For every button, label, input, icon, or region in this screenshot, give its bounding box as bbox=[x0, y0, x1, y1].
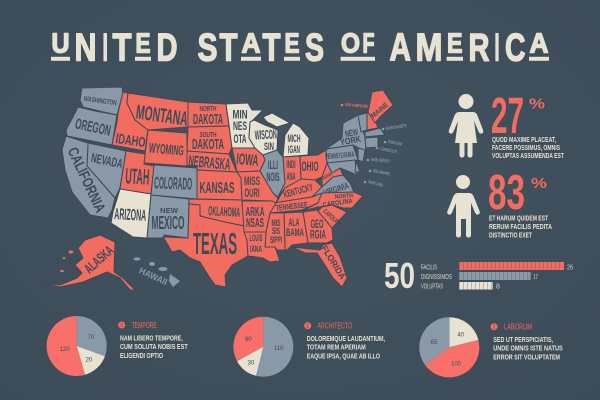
pie chart: 70 bbox=[88, 335, 95, 341]
state: Wisconsin bbox=[249, 120, 278, 155]
state: Oregon: OREGON bbox=[74, 116, 112, 140]
title: R bbox=[468, 26, 490, 69]
state: Texas: TEXAS bbox=[193, 226, 237, 261]
state: Arkansas: NSAS bbox=[246, 215, 264, 230]
state: Louisiana bbox=[244, 232, 280, 262]
state: Ohio bbox=[300, 150, 327, 180]
small state callouts: CONNECTICUT bbox=[380, 146, 398, 155]
title: E bbox=[136, 28, 150, 58]
state: New Jersey bbox=[358, 148, 365, 162]
state: North Dakota: DAKOTA bbox=[193, 111, 223, 128]
state: New Mexico: MEXICO bbox=[152, 213, 184, 233]
text block: SED UT PERSPICIATIS, bbox=[493, 335, 553, 344]
title: S bbox=[305, 26, 324, 69]
state: Michigan: MICH bbox=[288, 133, 301, 145]
state: South Dakota: SOUTH bbox=[200, 132, 216, 139]
title: C bbox=[505, 26, 526, 69]
title: E bbox=[447, 28, 462, 58]
state: Iowa bbox=[232, 148, 265, 172]
state: Kentucky: KENTUCKY bbox=[282, 182, 314, 201]
state: Mississippi: SIS bbox=[272, 226, 280, 236]
text block: QUOD MAXIME PLACEAT, bbox=[492, 135, 556, 144]
map of the United States: WISCON bbox=[254, 126, 277, 143]
state: Virginia bbox=[312, 175, 354, 198]
stat: 83 percent male: % bbox=[531, 175, 547, 192]
state: Mississippi bbox=[265, 213, 285, 250]
state: Washington bbox=[80, 87, 123, 115]
title: I bbox=[102, 26, 108, 69]
pie panel: tempore: 3 bbox=[120, 323, 123, 329]
state: California: CALIFORNIA bbox=[64, 145, 109, 216]
bar chart: 50: FACILIS bbox=[421, 264, 437, 272]
state: Hawaii: HAWAII bbox=[138, 265, 169, 287]
state: Illinois: ILLI bbox=[268, 158, 278, 172]
bar chart: 50: 26 bbox=[567, 264, 573, 272]
pie chart: 30 bbox=[248, 360, 255, 366]
text block bbox=[493, 335, 563, 362]
text block: VOLUPTAS ASSUMENDA EST bbox=[492, 151, 564, 160]
title: U bbox=[52, 28, 70, 58]
state: Wyoming: WYOMING bbox=[148, 140, 185, 159]
state: Missouri: MISS bbox=[244, 174, 260, 188]
title: N bbox=[74, 26, 96, 69]
state: South Carolina bbox=[317, 205, 347, 228]
state: Utah bbox=[120, 151, 154, 194]
state: New Mexico: NEW bbox=[160, 208, 178, 215]
state: Virginia: VIRGINIA bbox=[322, 180, 350, 198]
state: Georgia: RGIA bbox=[310, 228, 326, 242]
pie chart: 110 bbox=[274, 346, 284, 352]
title: T bbox=[262, 26, 281, 69]
state: Missouri bbox=[237, 171, 278, 203]
state: Kansas bbox=[197, 170, 242, 200]
state: Michigan bbox=[263, 113, 309, 157]
bar chart: 50: VOLUPTAS bbox=[421, 284, 443, 290]
title: O bbox=[341, 28, 360, 58]
text block: ERROR SIT VOLUPTATEM bbox=[493, 352, 560, 362]
small state callouts: NEW JERSEY bbox=[371, 157, 390, 164]
title: T bbox=[220, 26, 238, 69]
pie chart bbox=[233, 317, 293, 377]
stat: 83 percent male: 83 bbox=[488, 166, 525, 220]
text block: NAM LIBERO TEMPORE, bbox=[120, 334, 183, 342]
small state callouts: MASSACHUSETTS bbox=[385, 123, 407, 131]
pie chart: 65 bbox=[431, 340, 438, 346]
state: Maine bbox=[368, 90, 393, 123]
state: Arkansas: ARKA bbox=[246, 204, 265, 219]
text block: FACERE POSSIMUS, OMNIS bbox=[492, 143, 560, 152]
text block bbox=[307, 334, 385, 360]
state: Louisiana: IANA bbox=[250, 244, 262, 254]
state: Tennessee: TENNESSEE bbox=[275, 200, 309, 213]
title: A bbox=[530, 28, 548, 58]
small state callouts: RHODE ISLAND bbox=[388, 139, 403, 146]
small state callouts bbox=[341, 102, 407, 188]
state: Alabama: BAMA bbox=[286, 227, 304, 239]
text block: RERUM FACILIS PEDITA bbox=[489, 222, 552, 231]
state: Ohio: OHIO bbox=[302, 158, 319, 174]
state: South Dakota bbox=[187, 126, 232, 154]
stat: 27 percent female: 27 bbox=[491, 87, 524, 144]
state: Alaska: ALASKA bbox=[81, 242, 117, 277]
state: Indiana: ANA bbox=[286, 171, 296, 183]
state: Hawaii bbox=[134, 257, 180, 287]
bar chart: 50 bbox=[384, 255, 573, 296]
bar chart: 50: 50 bbox=[384, 255, 415, 296]
title: M bbox=[416, 26, 442, 69]
state: Illinois bbox=[260, 150, 285, 197]
state: Maine: MAINE bbox=[370, 102, 390, 120]
state: Idaho bbox=[112, 92, 148, 151]
state: Michigan: IGAN bbox=[288, 144, 300, 156]
text block bbox=[489, 214, 552, 240]
pie panel: architecto bbox=[233, 317, 385, 377]
state: Indiana bbox=[278, 156, 301, 197]
pie chart: 40 bbox=[457, 332, 465, 338]
state: New Hampshire bbox=[367, 112, 378, 130]
state: Georgia bbox=[303, 210, 333, 243]
state: Mississippi: MIS bbox=[272, 218, 280, 228]
small state callouts: MARYLAND bbox=[368, 179, 384, 188]
stat: 83 percent male bbox=[447, 166, 552, 240]
state: Alaska bbox=[40, 235, 135, 290]
state: Tennessee bbox=[270, 193, 322, 213]
state: Kansas: KANSAS bbox=[200, 180, 235, 197]
title: T bbox=[112, 26, 132, 69]
map of the United States: UTAH bbox=[125, 163, 150, 190]
state: West Virginia bbox=[320, 163, 343, 187]
state: Mississippi: SIPPI bbox=[270, 235, 282, 245]
state: Illinois: NOIS bbox=[266, 170, 280, 184]
pie chart: 120 bbox=[60, 347, 70, 353]
small state callouts: NEW HAMPSHIRE bbox=[345, 102, 368, 109]
text block: DOLOREMQUE LAUDANTIUM, bbox=[307, 334, 385, 343]
state: New York bbox=[326, 115, 366, 152]
state: Minnesota bbox=[226, 103, 263, 148]
pie panel: laborum: LABORUM bbox=[504, 322, 532, 332]
pie panel: laborum bbox=[419, 317, 563, 377]
state: Nevada: NEVADA bbox=[90, 150, 124, 171]
title: E bbox=[284, 28, 300, 58]
state: Missouri: OURI bbox=[244, 186, 260, 200]
bar chart: 50: 8 bbox=[496, 284, 500, 290]
title: F bbox=[362, 28, 374, 58]
text block: DISTINCTIO EXET bbox=[489, 230, 532, 240]
map of the United States: OKLAHOMA bbox=[208, 203, 241, 220]
map of the United States bbox=[40, 87, 393, 290]
state: Nebraska: NEBRASKA bbox=[188, 153, 231, 174]
pie panel: tempore: TEMPORE bbox=[132, 320, 157, 330]
state: Vermont bbox=[358, 113, 367, 132]
state: South Carolina: CAROLINA bbox=[321, 208, 343, 228]
state: North Carolina: NORTH bbox=[335, 193, 353, 201]
state: North Carolina: CAROLINA bbox=[322, 198, 353, 209]
state: North Dakota bbox=[188, 102, 229, 128]
state: New York: YORK bbox=[339, 134, 362, 147]
state: Minnesota: OTA bbox=[234, 132, 247, 146]
text block: UNDE OMNIS ISTE NATUS bbox=[493, 344, 563, 352]
state: Massachusetts bbox=[365, 128, 385, 137]
state: Florida: FLORIDA bbox=[319, 244, 348, 282]
title: I bbox=[494, 26, 500, 69]
title: A bbox=[242, 28, 260, 58]
state: Washington: WASHINGTON bbox=[83, 96, 117, 107]
text block bbox=[120, 334, 188, 360]
state: Maryland and Delaware bbox=[327, 160, 360, 175]
state: Montana: MONTANA bbox=[135, 102, 189, 131]
pie panel: architecto: ARCHITECTO bbox=[317, 321, 353, 331]
state: Colorado bbox=[151, 165, 197, 199]
state: Oklahoma bbox=[189, 199, 244, 226]
state: Arkansas bbox=[242, 201, 276, 232]
icon: female figure bbox=[449, 94, 483, 158]
state: New Mexico bbox=[147, 195, 189, 238]
stat: 27 percent female bbox=[449, 87, 564, 160]
state: North Dakota: NORTH bbox=[200, 106, 216, 113]
text block bbox=[492, 135, 564, 160]
small state callouts: DELAWARE bbox=[373, 168, 390, 177]
state: Pennsylvania: PENNSYLVANIA bbox=[325, 150, 355, 161]
map of the United States: COLORADO bbox=[154, 173, 193, 194]
state: Florida bbox=[292, 243, 348, 287]
pie panel: laborum: 1 bbox=[493, 324, 496, 330]
state: Wyoming bbox=[144, 130, 187, 166]
state: Indiana: INDI bbox=[286, 159, 296, 171]
state: Connecticut and Rhode Island bbox=[365, 137, 378, 148]
pie chart bbox=[47, 316, 107, 376]
state: West Virginia: VIRGINIA bbox=[320, 171, 333, 183]
pie chart: 20 bbox=[86, 358, 93, 364]
state: California bbox=[62, 136, 115, 218]
state: Alabama: ALA bbox=[288, 217, 300, 229]
state: South Dakota: DAKOTA bbox=[192, 136, 224, 153]
pie chart: 60 bbox=[245, 337, 252, 343]
state: Arizona: ARIZONA bbox=[114, 206, 147, 225]
state: Alabama bbox=[284, 212, 308, 250]
state: New York: NEW bbox=[344, 127, 359, 139]
text block: EAQUE IPSA, QUAE AB ILLO bbox=[307, 352, 380, 360]
state: Nevada bbox=[87, 143, 126, 198]
stat: 27 percent female: % bbox=[529, 96, 545, 112]
state: Pennsylvania bbox=[325, 145, 358, 163]
state: Louisiana: LOUIS bbox=[250, 233, 262, 243]
text block: ET HARUM QUIDEM EST bbox=[489, 214, 548, 222]
bar chart: 50: DIGNISSIMOS bbox=[421, 274, 452, 281]
state: Minnesota: NES bbox=[233, 119, 247, 133]
state: Idaho: IDAHO bbox=[115, 130, 147, 150]
state: Oregon bbox=[66, 107, 117, 145]
title: A bbox=[390, 26, 411, 69]
state: Montana bbox=[127, 93, 189, 131]
title: D bbox=[156, 26, 178, 69]
pie chart bbox=[419, 317, 479, 377]
state: Texas bbox=[163, 204, 248, 287]
icon: male figure bbox=[447, 175, 480, 238]
text block: CUM SOLUTA NOBIS EST bbox=[120, 342, 188, 351]
state: Georgia: GEO bbox=[310, 217, 324, 231]
pie panel: tempore bbox=[47, 316, 188, 376]
text block: ELIGENDI OPTIO bbox=[120, 351, 163, 360]
state: Minnesota: MIN bbox=[232, 108, 248, 122]
pie panel: architecto: 2 bbox=[306, 324, 309, 330]
state: Arizona bbox=[111, 189, 151, 238]
title: S bbox=[198, 26, 218, 69]
title bbox=[51, 26, 549, 69]
state: North Carolina bbox=[302, 192, 363, 211]
state: Wisconsin: SIN bbox=[264, 141, 274, 153]
bar chart: 50: 17 bbox=[533, 274, 538, 281]
text block: TOTAM REM APERIAM bbox=[307, 342, 366, 352]
state: Nebraska bbox=[187, 151, 237, 174]
state: Iowa: IOWA bbox=[236, 151, 259, 170]
state: Kentucky bbox=[276, 179, 322, 203]
pie chart: 100 bbox=[451, 362, 462, 368]
